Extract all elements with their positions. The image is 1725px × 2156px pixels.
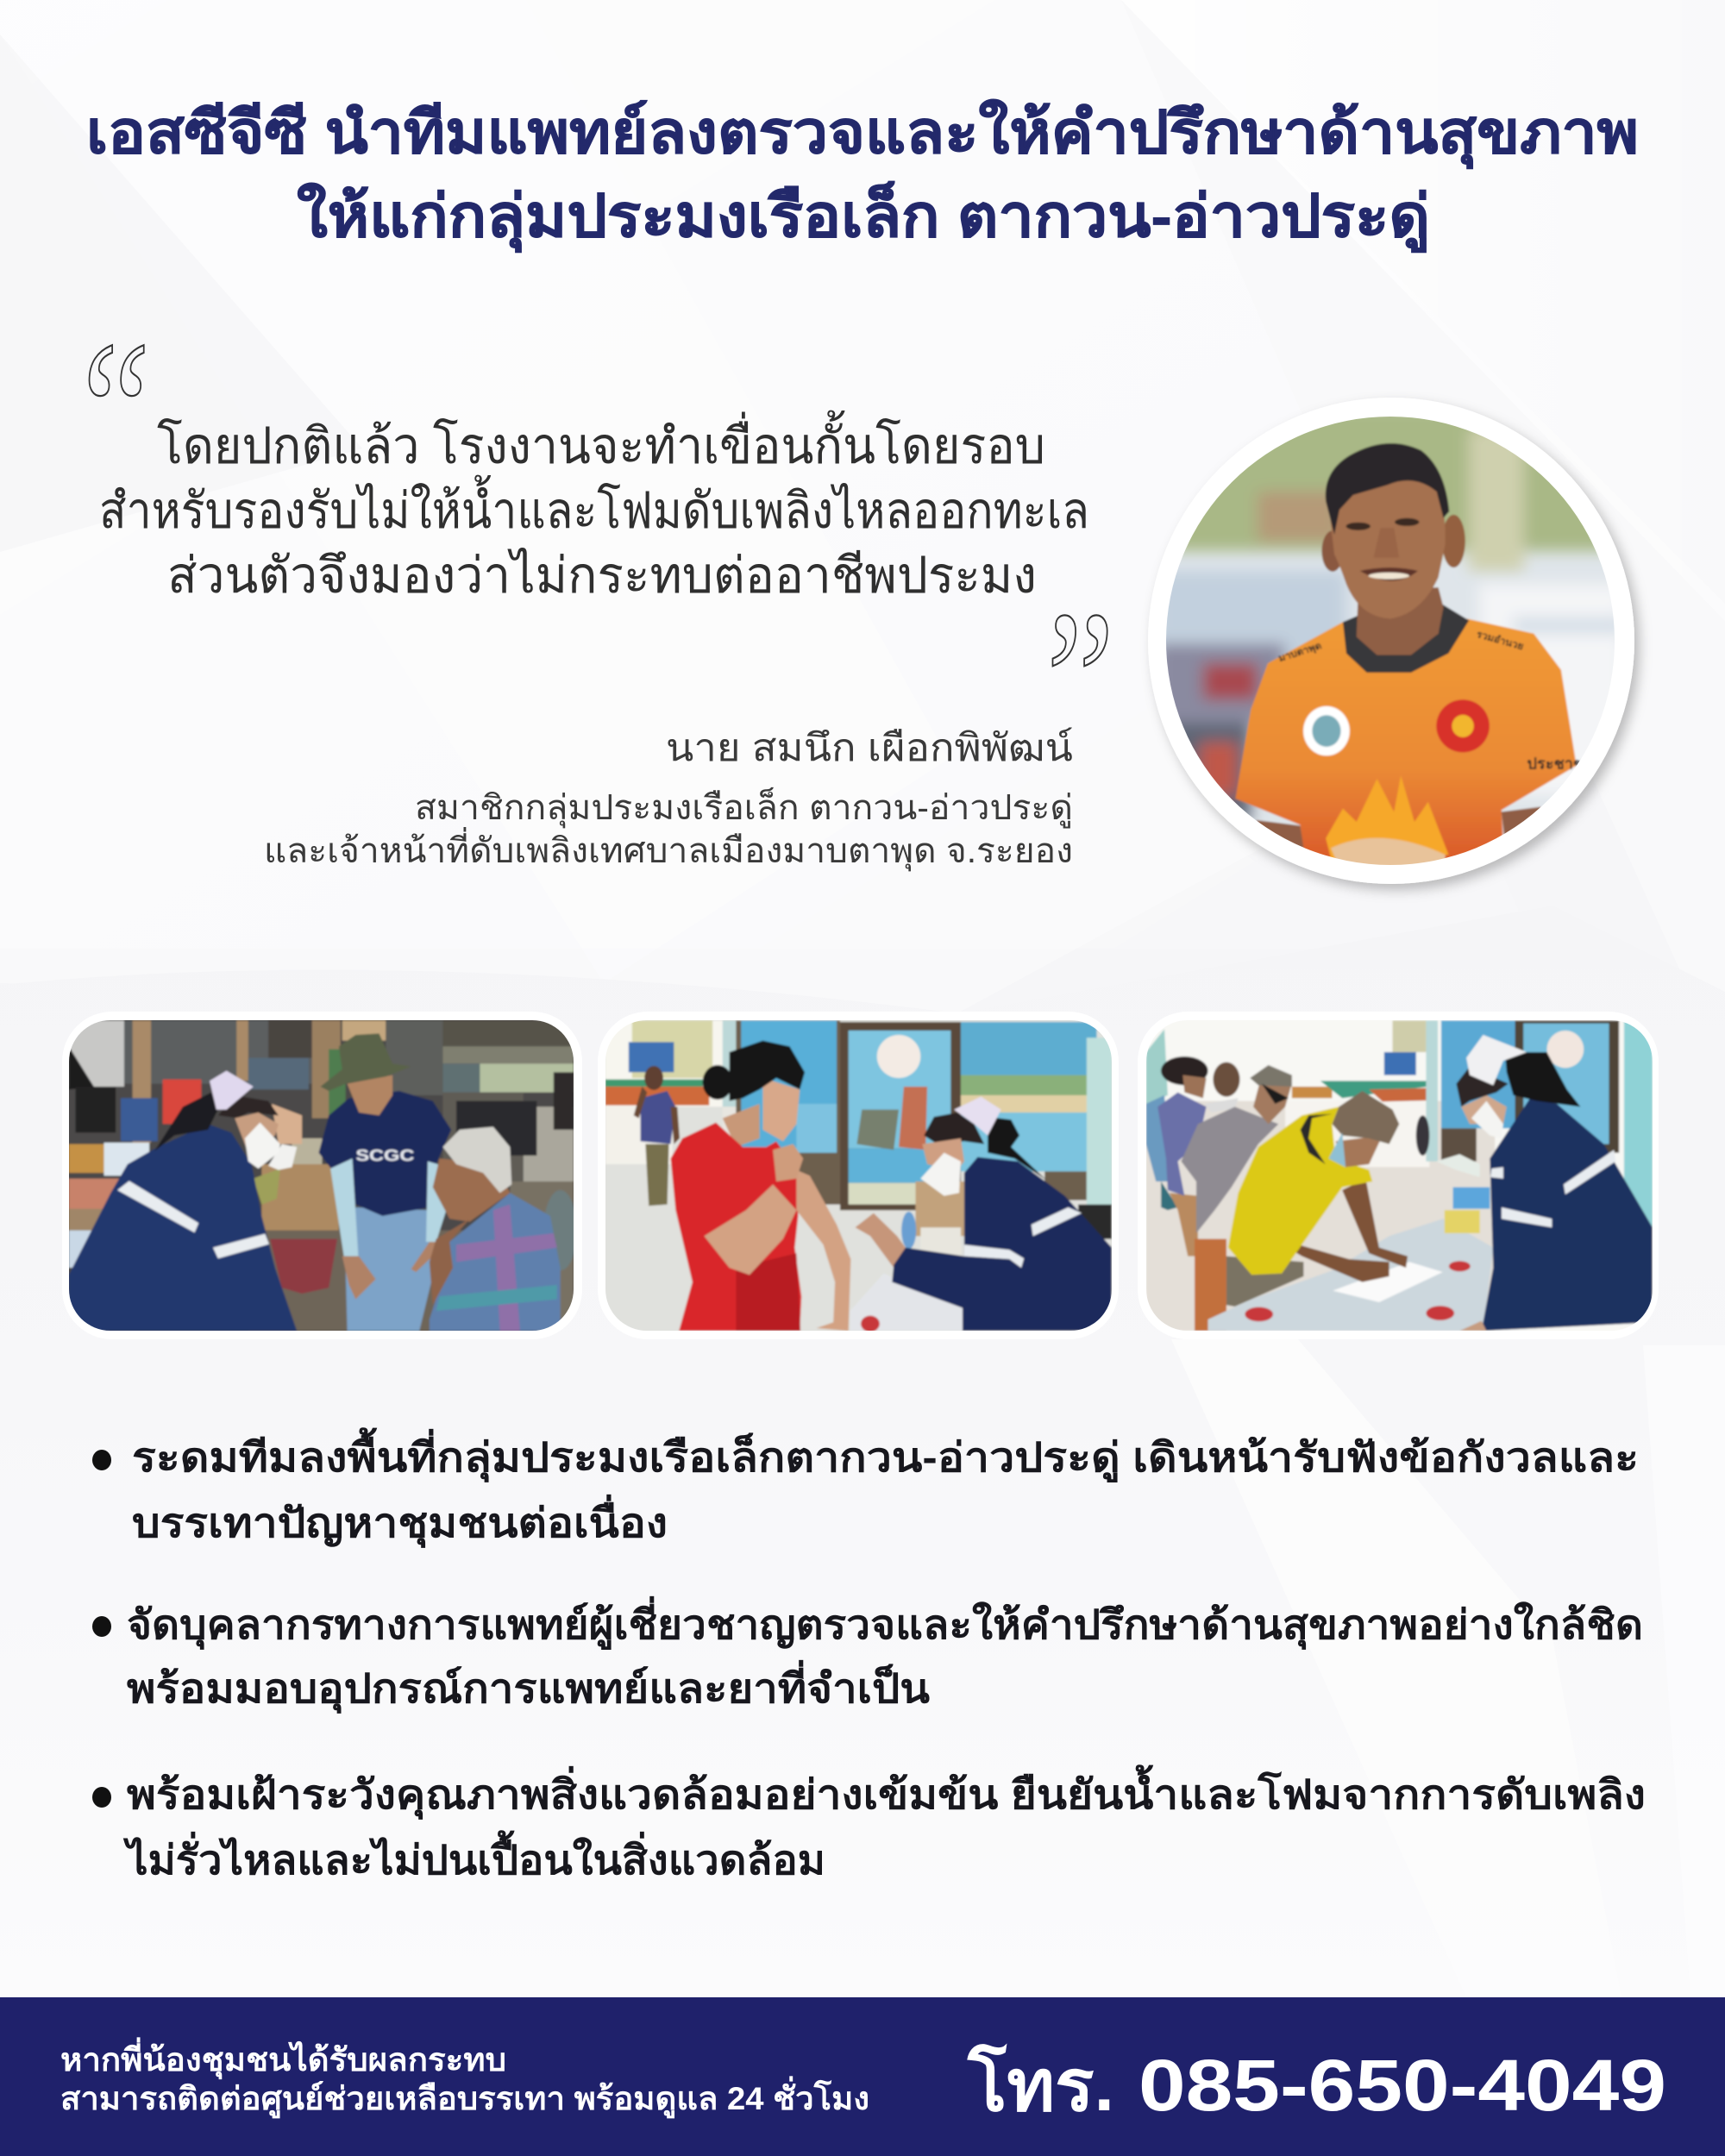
bullet 2	[92, 1595, 1643, 1714]
bullet 3: ไม่รั่วไหลและไม่ปนเปื้อนในสิ่งแวดล้อม	[122, 1830, 825, 1883]
quote text	[99, 411, 1089, 604]
shirt	[1235, 618, 1577, 868]
helpline note	[60, 2037, 869, 2119]
title: เอสซีจีซี นำทีมแพทย์ลงตรวจและให้คำปรึกษาด้านสุขภาพ	[86, 98, 1639, 169]
bullet 3	[92, 1764, 1646, 1883]
portrait photo: ประชาชน	[1527, 755, 1596, 773]
bullet 1	[92, 1427, 1639, 1548]
nurse	[855, 1213, 906, 1268]
phone number: 085-650-4049	[1138, 2045, 1666, 2126]
icon: opening quote mark: “	[82, 302, 150, 520]
badges	[1303, 706, 1350, 755]
title	[86, 98, 1639, 254]
footer band	[0, 1997, 1725, 2156]
woman behind nurse	[254, 1169, 280, 1205]
speaker attribution: และเจ้าหน้าที่ดับเพลิงเทศบาลเมืองมาบตาพุด จ.ระยอง	[264, 827, 1073, 872]
photo: nurse giving vaccination	[595, 1012, 1119, 1339]
speaker attribution: นาย สมนึก เผือกพิพัฒน์	[666, 727, 1073, 769]
bullet 3: พร้อมเฝ้าระวังคุณภาพสิ่งแวดล้อมอย่างเข้มข้น ยืนยันน้ำและโฟมจากการดับเพลิง	[127, 1764, 1646, 1820]
neck and collar	[1343, 604, 1469, 673]
man in yellow	[1226, 1257, 1303, 1307]
title: ให้แก่กลุ่มประมงเรือเล็ก ตากวน-อ่าวประดู่	[297, 181, 1430, 254]
phone number	[967, 2044, 1666, 2126]
photo: resident signing paperwork	[1134, 1012, 1659, 1339]
portrait photo: รวมอำนวย	[1475, 628, 1525, 652]
portrait photo	[1148, 398, 1634, 884]
photo: nurse and community members	[60, 1012, 584, 1339]
background man	[641, 1091, 675, 1144]
bystanders	[1146, 1095, 1171, 1181]
old man	[430, 1193, 561, 1331]
woman in red	[723, 1104, 760, 1147]
nurse	[1482, 1098, 1653, 1331]
bullet 2: จัดบุคลากรทางการแพทย์ผู้เชี่ยวชาญตรวจและให้คำปรึกษาด้านสุขภาพอย่างใกล้ชิด	[127, 1595, 1643, 1651]
nurse	[69, 1124, 297, 1331]
portrait photo: มาบตาพุด	[1277, 640, 1323, 665]
bullet 1: บรรเทาปัญหาชุมชนต่อเนื่อง	[132, 1494, 668, 1548]
head	[1321, 530, 1344, 572]
bullet 1: ระดมทีมลงพื้นที่กลุ่มประมงเรือเล็กตากวน-อ่าวประดู่ เดินหน้ารับฟังข้อกังวลและ	[132, 1427, 1639, 1483]
quote text: สำหรับรองรับไม่ให้น้ำและโฟมดับเพลิงไหลออกทะเล	[99, 475, 1089, 539]
photo: nurse and community members: SCGC	[355, 1147, 415, 1165]
quote text: โดยปกติแล้ว โรงงานจะทำเขื่อนกั้นโดยรอบ	[157, 411, 1045, 474]
table	[1208, 1219, 1493, 1331]
bullet 2: พร้อมมอบอุปกรณ์การแพทย์และยาที่จำเป็น	[127, 1659, 930, 1714]
speaker attribution	[264, 727, 1073, 872]
man in cap	[346, 1207, 436, 1331]
bullet list	[92, 1427, 1646, 1883]
speaker attribution: สมาชิกกลุ่มประมงเรือเล็ก ตากวน-อ่าวประดู่	[415, 787, 1073, 829]
phone number: โทร.	[967, 2044, 1114, 2126]
quote text: ส่วนตัวจึงมองว่าไม่กระทบต่ออาชีพประมง	[167, 547, 1037, 604]
icon: closing quote mark: ”	[1046, 572, 1114, 790]
helpline note: หากพี่น้องชุมชนได้รับผลกระทบ	[60, 2037, 506, 2080]
helpline note: สามารถติดต่อศูนย์ช่วยเหลือบรรเทา พร้อมดูแล 24 ชั่วโมง	[60, 2076, 869, 2119]
